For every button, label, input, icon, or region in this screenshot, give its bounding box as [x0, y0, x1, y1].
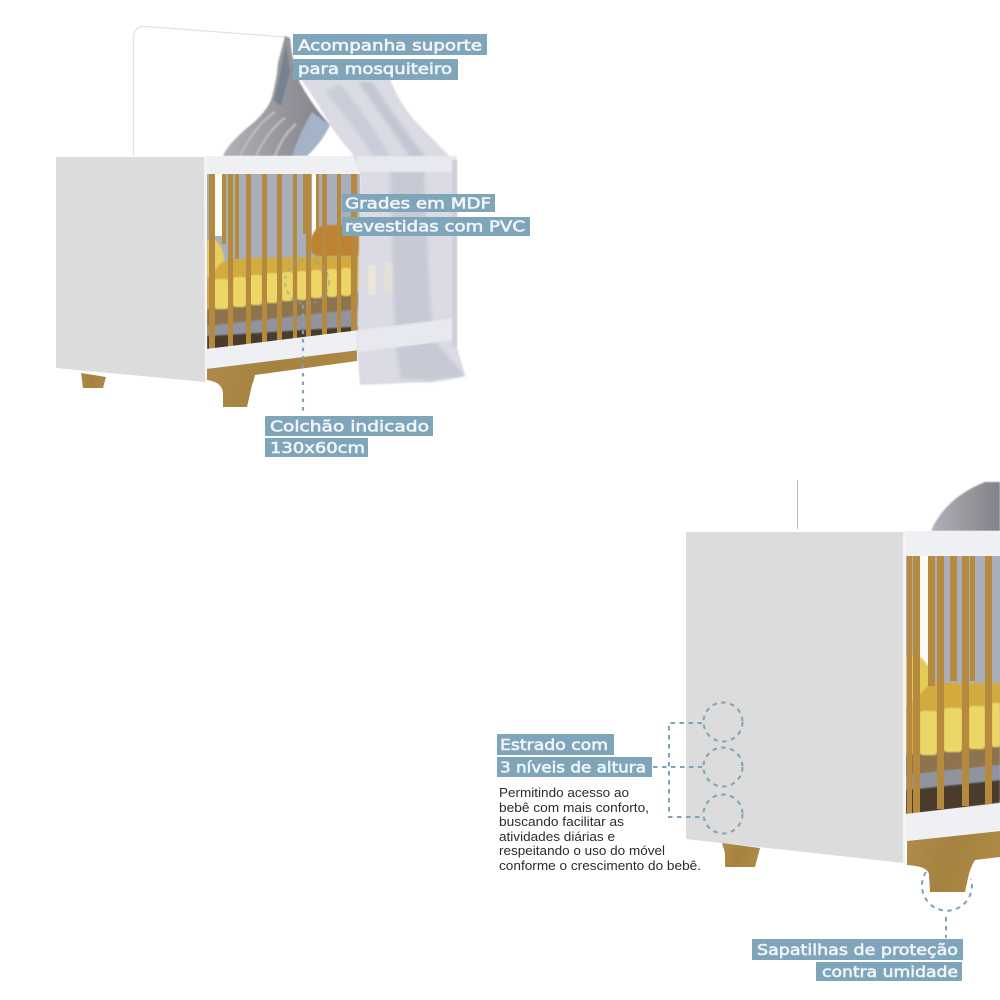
- mattress: [207, 256, 362, 352]
- crib interior back wall: [207, 174, 360, 372]
- white gaps between slats: [215, 174, 222, 236]
- rear foot: [722, 843, 760, 867]
- label: bed base levels: [497, 734, 652, 777]
- white gap: [920, 556, 928, 666]
- slats: [209, 174, 357, 350]
- top rail: [205, 156, 357, 174]
- label: mosquito net support: para mosquiteiro: [298, 60, 452, 78]
- description paragraph: respeitando o uso do móvel: [499, 844, 665, 858]
- mosquito net dome: [931, 482, 1000, 531]
- description paragraph: [499, 786, 701, 873]
- label: bed base levels: 3 níveis de altura: [500, 758, 646, 776]
- interior back wall: [906, 556, 1000, 815]
- label: bed base levels: Estrado com: [500, 736, 608, 754]
- wood base with leg: [907, 831, 1000, 892]
- bottom crib illustration: [653, 480, 1000, 938]
- yellow side pillow: [207, 240, 224, 278]
- mosquito net support rod: [797, 480, 798, 529]
- orange bolster pillow: [310, 225, 362, 256]
- label: MDF slats: Grades em MDF: [345, 194, 491, 212]
- label: mattress size: 130x60cm: [270, 439, 365, 457]
- label: MDF slats: revestidas com PVC: [345, 218, 525, 236]
- description paragraph: bebê com mais conforto,: [499, 801, 649, 815]
- label: mosquito net support: [293, 34, 487, 80]
- bottom rail: [905, 803, 1000, 841]
- front mosquito net drape: [300, 78, 465, 385]
- label: mattress size: Colchão indicado: [270, 418, 429, 436]
- label: MDF slats: [342, 194, 530, 236]
- side panel: [686, 532, 903, 863]
- description paragraph: buscando facilitar as: [499, 815, 624, 829]
- rear foot: [81, 373, 106, 388]
- mattress callout circle and dotted line: [285, 260, 329, 415]
- back mosquito net drape: [223, 36, 330, 156]
- description paragraph: Permitindo acesso ao: [499, 786, 629, 800]
- wood base with leg: [207, 349, 357, 407]
- label: protective feet: Sapatilhas de proteção: [757, 941, 958, 959]
- label: mattress size: [265, 416, 433, 457]
- top crib illustration: [56, 26, 465, 415]
- description paragraph: atividades diárias e: [499, 830, 615, 844]
- top rail: [903, 531, 1000, 556]
- label: protective feet: [752, 939, 963, 981]
- side panel: [56, 157, 205, 382]
- yellow pillow: [906, 655, 932, 707]
- slats: [907, 556, 992, 814]
- description paragraph: conforme o crescimento do bebê.: [499, 859, 701, 873]
- foot callout circle and line: [922, 872, 972, 938]
- label: protective feet: contra umidade: [822, 963, 958, 981]
- mosquito net support rod: [134, 26, 286, 156]
- bottom rail: [206, 330, 360, 369]
- label: mosquito net support: Acompanha suporte: [298, 36, 482, 54]
- mattress: [906, 683, 1000, 815]
- level callout circles and connector: [653, 702, 742, 834]
